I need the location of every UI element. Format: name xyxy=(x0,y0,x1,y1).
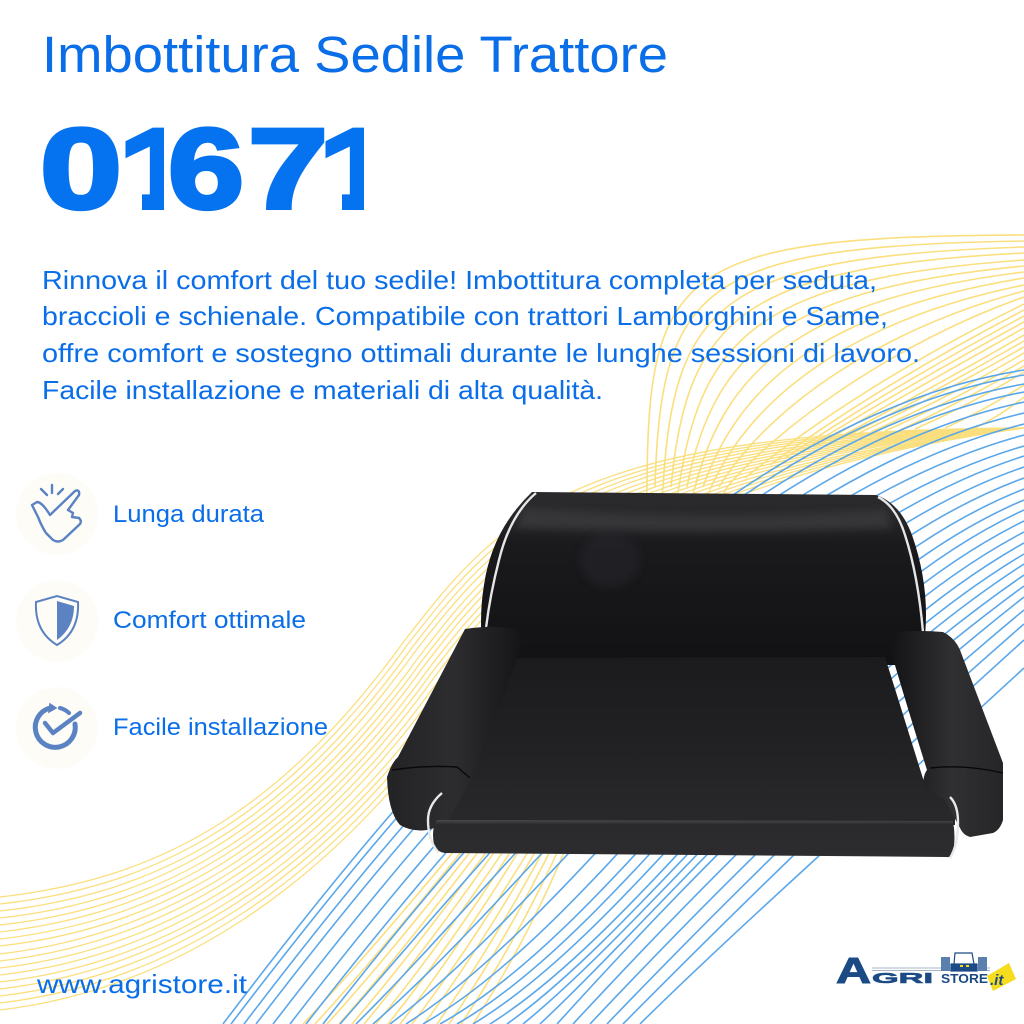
description text block: offre comfort e sostegno ottimali durante le lunghe sessioni di lavoro. xyxy=(42,338,920,368)
description text block: braccioli e schienale. Compatibile con trattori Lamborghini e Same, xyxy=(42,301,888,331)
seat backrest xyxy=(481,492,926,665)
product code: 1 xyxy=(118,106,200,233)
description text block xyxy=(42,265,920,405)
product code: 1 xyxy=(318,106,400,233)
logo wordmark store: STORE xyxy=(941,971,988,986)
title: Imbottitura Sedile Trattore xyxy=(42,26,668,83)
feature: Lunga durata xyxy=(16,473,264,555)
logo tractor xyxy=(941,953,987,971)
logo wordmark Agri: GRI xyxy=(872,970,933,987)
decorative yellow wave upper right xyxy=(303,235,1024,1024)
logo yellow tag xyxy=(987,963,1016,991)
logo: Agri Store xyxy=(836,950,1016,991)
product code: 6 xyxy=(168,106,244,233)
label: Facile installazione xyxy=(113,714,328,741)
label: Lunga durata xyxy=(113,501,264,528)
seat cushion surface xyxy=(432,657,955,825)
product photo: black tractor seat cushion xyxy=(387,492,1003,858)
product code xyxy=(43,126,364,212)
logo yellow tag: .it xyxy=(990,972,1004,989)
decorative blue wave xyxy=(223,370,1024,1024)
icon: shield xyxy=(36,596,78,645)
icon: tapping hand xyxy=(32,485,81,542)
right armrest xyxy=(890,631,1003,837)
label: Comfort ottimale xyxy=(113,607,306,634)
feature: Facile installazione xyxy=(16,687,328,769)
left armrest xyxy=(387,627,521,830)
website url: www.agristore.it xyxy=(36,969,248,999)
description text block: Facile installazione e materiali di alta qualità. xyxy=(42,375,603,405)
decorative yellow wave lower left xyxy=(0,428,1024,1010)
icon: check with arrow xyxy=(35,704,80,747)
logo wordmark Agri: A xyxy=(836,950,871,991)
product code: 0 xyxy=(40,106,122,233)
product code: 7 xyxy=(248,106,328,233)
seat front band xyxy=(433,820,954,857)
feature: Comfort ottimale xyxy=(16,580,306,662)
logo wordmark Agri xyxy=(836,950,933,991)
white piping front xyxy=(428,793,958,858)
description text block: Rinnova il comfort del tuo sedile! Imbottitura completa per seduta, xyxy=(42,265,877,295)
logo rule lines xyxy=(872,968,990,970)
